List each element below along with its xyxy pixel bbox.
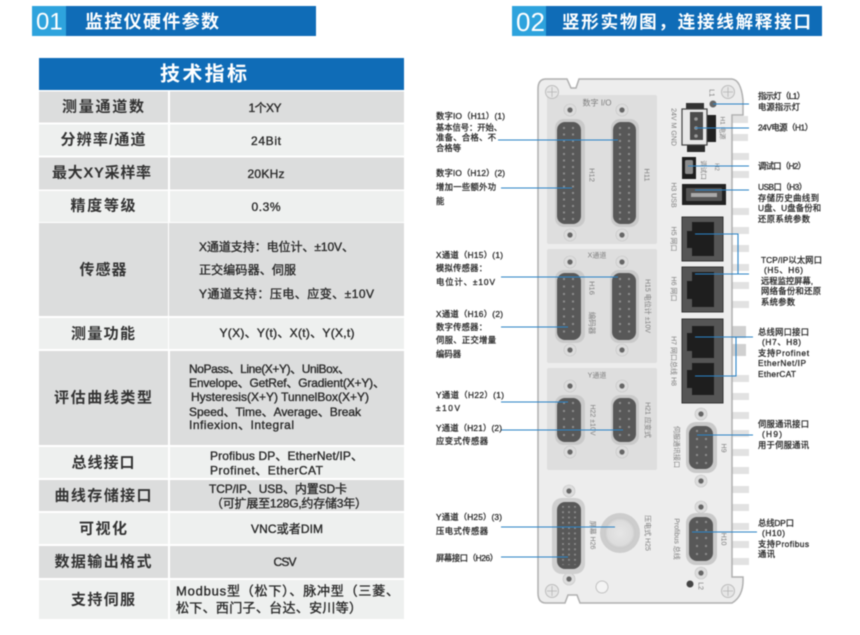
label: H7 H8: 支持Profinet xyxy=(758,348,810,358)
label: H11: 合格等 xyxy=(436,143,461,153)
connector H12 xyxy=(555,104,596,241)
indicator L2 and stud: L2 xyxy=(696,582,704,590)
device body xyxy=(538,79,743,603)
row: curve types xyxy=(39,351,404,445)
label: H16: 编码器 xyxy=(436,349,462,359)
row: sampling rate: 最大XY采样率 xyxy=(52,164,151,182)
panel: Y channel: Y通道 xyxy=(588,370,606,380)
row: accuracy: 0.3% xyxy=(252,200,281,214)
label: H12: 数字IO（H12）(2) xyxy=(436,168,505,178)
label: H7 H8: EtherNet/IP xyxy=(758,358,806,368)
connector H15 xyxy=(610,256,652,356)
panel: Y channel xyxy=(547,368,657,470)
connector H25 xyxy=(600,513,652,553)
connector H11: H11 xyxy=(642,168,652,182)
ethernet port H5: H5 网口 xyxy=(670,227,678,251)
indicator L1: L1 xyxy=(708,89,714,97)
label: H21: 应变式传感器 xyxy=(436,436,489,446)
connector H26 xyxy=(552,485,598,585)
label: H9: 伺服通讯接口 xyxy=(758,419,809,429)
label: H25: Y通道（H25）(3) xyxy=(436,512,502,522)
label: H10: (H10) xyxy=(762,528,785,538)
row: sampling rate: 20KHz xyxy=(248,167,284,181)
section header 01: 01 xyxy=(36,8,63,36)
row: measurement functions: 测量功能 xyxy=(71,324,135,342)
label: H15: X通道（H15）(1) xyxy=(436,250,503,260)
panel: digital I/O xyxy=(547,95,657,244)
label: H16: 伺服、正交增量 xyxy=(436,335,496,345)
connector H11 xyxy=(611,104,652,241)
connector H12: H12 xyxy=(588,168,596,182)
label: H3: U盘、U盘备份和 xyxy=(758,203,821,213)
row: sensors xyxy=(39,223,404,316)
row: sampling rate xyxy=(39,158,404,190)
label: H7 H8 xyxy=(758,327,810,379)
row: curve types: NoPass、Line(X+Y)、UniBox、 xyxy=(189,362,350,376)
connector H16 xyxy=(555,256,598,356)
label: H3: 还原系统参数 xyxy=(758,214,811,224)
row: output format: 数据输出格式 xyxy=(54,552,152,570)
label: H21 xyxy=(436,423,502,446)
label: H16 xyxy=(436,309,503,359)
label: H25: 压电式传感器 xyxy=(436,526,489,536)
row: bus interface: 总线接口 xyxy=(72,454,134,472)
label: H1: 24V电源（H1） xyxy=(758,122,813,132)
connector H22 xyxy=(555,380,596,458)
corner screws xyxy=(546,86,734,598)
label: H2: 调试口（H2） xyxy=(758,161,806,171)
indicator L2 and stud xyxy=(596,580,704,593)
label: H11: 准备、合格、不 xyxy=(436,132,496,142)
row: resolution: 分辨率/通道 xyxy=(60,130,146,148)
label: H26: 屏幕接口（H26） xyxy=(436,553,498,563)
row: sensors: X通道支持：电位计、±10V、 xyxy=(199,239,354,254)
heat sink fins xyxy=(732,116,749,565)
connector H10: Profibus 总线 xyxy=(672,518,682,560)
label: H7 H8: (H7、H8) xyxy=(762,337,801,347)
row: measurement functions xyxy=(39,318,404,349)
ethernet ports H7 and H8: H7 网口总线 H8 xyxy=(670,336,678,386)
label: H15: 模拟传感器： xyxy=(436,263,487,273)
power connector H1: H1 电源 xyxy=(718,116,728,140)
label: H16: X通道（H16）(2) xyxy=(436,309,503,319)
row: bus interface: Profibus DP、EtherNet/IP、 xyxy=(210,449,363,463)
section header 02: 02 xyxy=(516,7,545,37)
panel: X channel xyxy=(547,249,657,363)
debug port H2 xyxy=(682,157,719,180)
connector H15: H15 电位计 ±10V xyxy=(644,279,652,333)
label: H5 H6: 系统参数 xyxy=(761,297,796,307)
label: H5 H6: TCP/IP以太网口 xyxy=(761,255,822,265)
row: resolution: 24Bit xyxy=(251,134,282,148)
connector H25: 压电式 H25 xyxy=(644,515,652,551)
row: visualisation: VNC或者DIM xyxy=(251,522,323,536)
section header 01 xyxy=(32,6,316,36)
section header 02: 竖形实物图，连接线解释接口 xyxy=(562,12,811,32)
table title xyxy=(39,58,404,90)
label: H9: 用于伺服通讯 xyxy=(758,440,810,450)
row: servo support xyxy=(39,580,404,619)
row: curve storage: TCP/IP、USB、内置SD卡 xyxy=(209,482,347,496)
label: H11: 基本信号：开始、 xyxy=(436,122,502,132)
row: curve storage: 曲线存储接口 xyxy=(54,486,152,504)
connector H21: H21 应变式 xyxy=(644,402,652,438)
row: bus interface: Profinet、EtherCAT xyxy=(210,464,324,478)
label: H5 H6: (H5、H6) xyxy=(764,265,803,275)
power connector H1: 24V M GND xyxy=(670,108,676,146)
label: H10 xyxy=(758,518,809,559)
row: channels xyxy=(39,92,404,122)
panel: digital I/O: 数字 I/O xyxy=(583,98,611,108)
label: H21: Y通道（H21）(2) xyxy=(436,423,502,433)
label: H10: 通讯 xyxy=(758,549,776,559)
connector H10 xyxy=(672,501,726,579)
label: L1 xyxy=(758,91,805,112)
label: H3: 存储历史曲线到 xyxy=(758,193,819,203)
debug port H2: 调试口 xyxy=(700,160,708,180)
label: H12 xyxy=(436,168,505,206)
label: H9 xyxy=(758,419,810,450)
row: curve types: Infiexion、Integral xyxy=(189,418,294,432)
USB port H3: H3 USB xyxy=(670,182,676,208)
row: visualisation: 可视化 xyxy=(79,520,127,538)
label: H5 H6 xyxy=(761,255,822,307)
label: L1: 指示灯（L1） xyxy=(758,91,805,101)
connector H9 xyxy=(672,408,726,487)
row: servo support: 支持伺服 xyxy=(71,592,135,608)
row: sensors: 正交编码器、伺服 xyxy=(199,262,296,277)
label: H11 xyxy=(436,111,505,153)
ethernet port H6 xyxy=(670,267,723,312)
row: curve types: Envelope、GetRef、Gradient(X+Y)、 xyxy=(189,376,385,390)
row: channels: 1个XY xyxy=(248,101,282,115)
USB port H3 xyxy=(670,182,726,208)
label: H5 H6: 网络备份和还原 xyxy=(761,286,821,296)
label: H10: 总线DP口 xyxy=(758,518,794,528)
connector H10: H10 xyxy=(720,533,726,546)
specification table xyxy=(39,58,404,619)
label: H22: ±10V xyxy=(436,403,460,413)
label: H10: 支持Profibus xyxy=(758,539,809,549)
debug port H2: H2 xyxy=(713,163,719,171)
label: H11: 数字IO（H11）(1) xyxy=(436,111,505,121)
row: resolution xyxy=(39,124,404,156)
ethernet ports H7 and H8 xyxy=(670,319,723,403)
label: L1: 电源指示灯 xyxy=(758,102,800,112)
label: H15 xyxy=(436,250,503,287)
label: H22 xyxy=(436,390,504,413)
connector H21 xyxy=(611,380,652,458)
label: H3 xyxy=(758,182,821,224)
row: accuracy xyxy=(39,191,404,222)
row: sensors: Y通道支持：压电、应变、±10V xyxy=(199,286,374,301)
row: bus interface xyxy=(39,447,404,478)
row: curve storage xyxy=(39,480,404,511)
panel: X channel: X通道 xyxy=(588,250,606,260)
row: channels: 测量通道数 xyxy=(62,98,144,116)
row: measurement functions: Y(X)、Y(t)、X(t)、Y(X,t) xyxy=(220,326,354,340)
connector H26: 屏幕 H26 xyxy=(588,521,598,549)
row: accuracy: 精度等级 xyxy=(70,196,136,214)
row: output format: CSV xyxy=(274,555,296,569)
row: visualisation xyxy=(39,513,404,544)
row: curve types: Hysteresis(X+Y) TunnelBox(X+Y) xyxy=(191,390,369,404)
row: sensors: 传感器 xyxy=(80,260,126,278)
label: H7 H8: 总线网口接口 xyxy=(758,327,809,337)
row: curve types: 评估曲线类型 xyxy=(54,388,152,406)
device photo xyxy=(538,79,749,603)
label: H7 H8: EtherCAT xyxy=(758,369,796,379)
label: H15: 电位计、±10V xyxy=(436,277,495,287)
section header 02 xyxy=(512,6,822,37)
connector H9: H9 xyxy=(720,444,726,453)
label: H5 H6: 远程监控屏幕, xyxy=(761,276,813,286)
power connector H1 xyxy=(670,103,728,152)
connector lines xyxy=(498,104,757,557)
row: curve storage: （可扩展至128G,约存储3年） xyxy=(211,496,367,510)
label: H9: (H9) xyxy=(762,429,782,439)
connector H9: 伺服通讯接口 xyxy=(672,426,682,468)
ethernet port H6: H6 网口 xyxy=(670,277,678,301)
connector H22: H22 ±10V xyxy=(588,404,596,436)
table title: 技术指标 xyxy=(160,62,247,86)
row: curve types: Speed、Time、Average、Break xyxy=(189,405,362,419)
ethernet port H5 xyxy=(670,217,723,261)
connector H16: 编码器 xyxy=(588,312,598,335)
indicator L1 xyxy=(708,89,716,108)
connector H16: H16 xyxy=(588,281,596,295)
label: H12: 增加一些额外功 xyxy=(436,182,496,192)
section header 01: 监控仪硬件参数 xyxy=(85,11,219,32)
row: output format xyxy=(39,546,404,578)
row: servo support: 松下、西门子、台达、安川等） xyxy=(176,600,362,616)
row: servo support: Modbus型（松下）、脉冲型（三菱、 xyxy=(176,584,399,598)
label: H25 xyxy=(436,512,502,536)
label: H22: Y通道（H22）(1) xyxy=(436,390,504,400)
label: H16: 数字传感器： xyxy=(436,322,487,332)
label: H3: USB口（H3） xyxy=(758,182,807,192)
label: H12: 能 xyxy=(436,196,444,206)
